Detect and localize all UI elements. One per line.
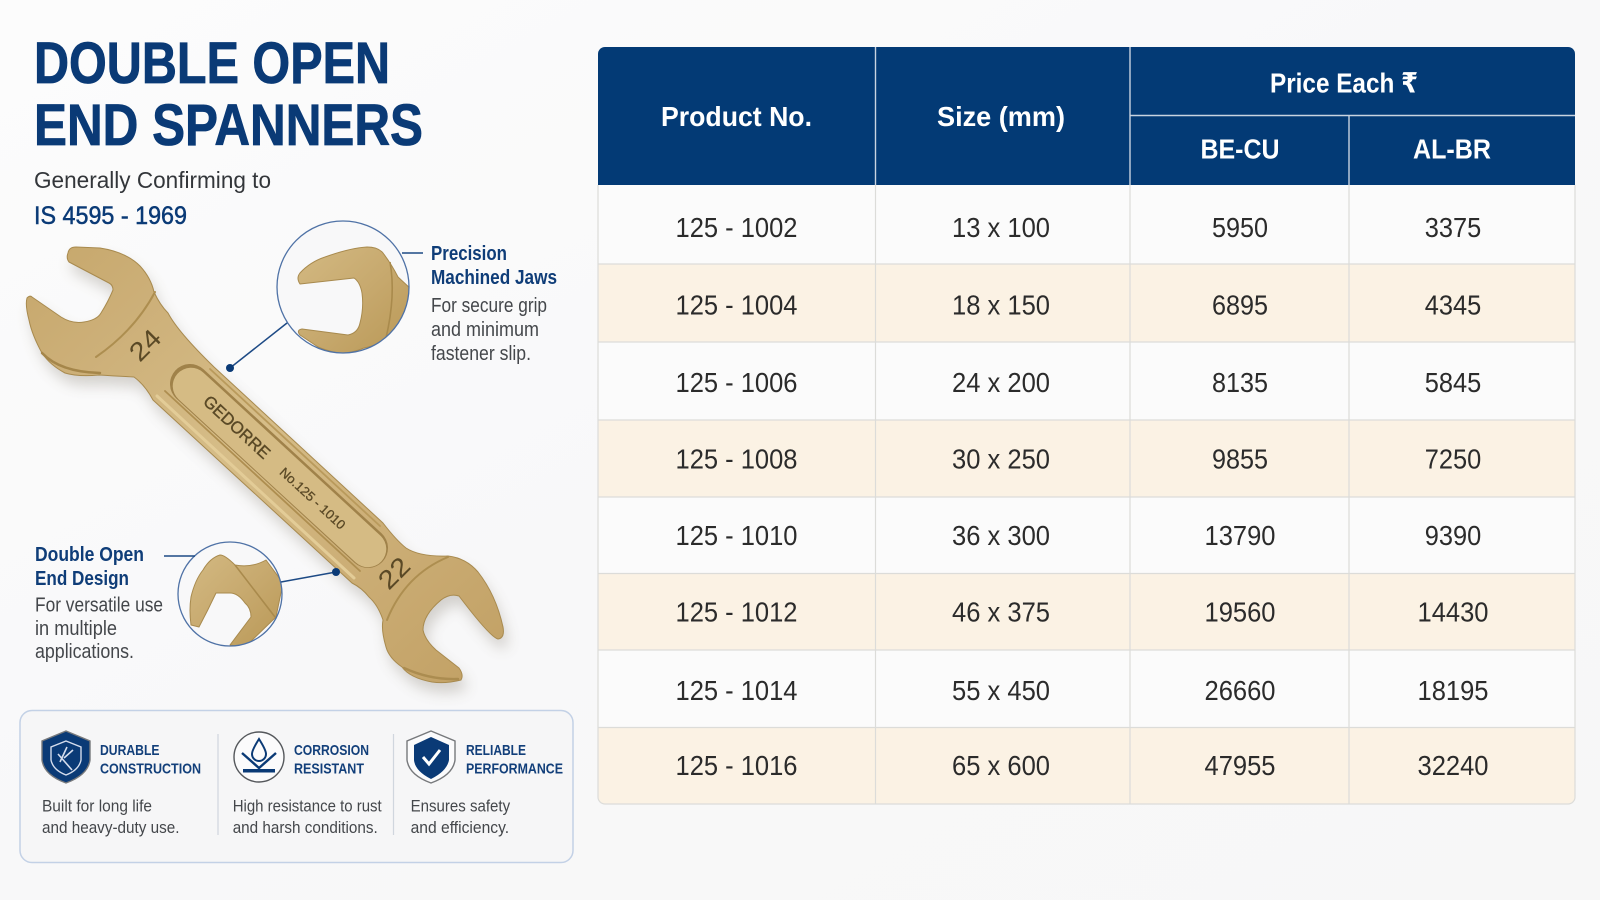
feature: durable construction: CONSTRUCTION (100, 761, 201, 778)
row 125-1012: 19560 (1204, 596, 1276, 628)
row 125-1004: 4345 (1425, 290, 1481, 320)
row 125-1010: 36 x 300 (952, 520, 1050, 551)
wrench engraved text: GEDORRE (199, 392, 274, 463)
callout text: in multiple (35, 618, 117, 640)
wrench engraved text: No.125 - 1010 (277, 464, 349, 532)
feature: corrosion resistant: High resistance to rust (233, 797, 382, 816)
callout text: For versatile use (35, 594, 163, 616)
feature: durable construction (42, 731, 201, 837)
feature: corrosion resistant: RESISTANT (294, 761, 364, 778)
row 125-1006: 5845 (1425, 367, 1481, 398)
panel: features (20, 710, 573, 862)
wrench engraved text: 24 (123, 323, 167, 367)
table header: Size (mm) (937, 101, 1065, 132)
feature: reliable performance: RELIABLE (466, 742, 526, 759)
table header: AL-BR (1413, 134, 1491, 165)
callout text: Double Open (35, 544, 144, 566)
row 125-1008: 9855 (1212, 444, 1268, 474)
icon: shield with check (407, 731, 455, 783)
wrench slot (190, 384, 368, 549)
row 125-1010: 13790 (1204, 520, 1276, 551)
feature: corrosion resistant (233, 732, 382, 837)
row 125-1002: 13 x 100 (952, 212, 1050, 243)
feature: durable construction: and heavy-duty use. (42, 818, 180, 837)
row 125-1014: 26660 (1204, 675, 1276, 706)
subtitle (34, 167, 271, 230)
callout: precision machined jaws (226, 221, 557, 372)
wrench illustration (26, 247, 507, 693)
row 125-1006: 8135 (1212, 367, 1268, 398)
magnifier circle: jaw detail (277, 221, 412, 353)
row 125-1016: 32240 (1418, 750, 1488, 781)
row 125-1012 (676, 596, 1488, 628)
feature: durable construction: Built for long life (42, 797, 152, 816)
magnifier circle: open end detail (178, 542, 283, 647)
feature: reliable performance: Ensures safety (411, 797, 511, 816)
table header: Product No. (661, 101, 812, 132)
row 125-1008: 125 - 1008 (676, 444, 798, 474)
callout text: fastener slip. (431, 343, 531, 365)
row 125-1006 (676, 367, 1481, 398)
subtitle: Generally Confirming to (34, 167, 271, 193)
row 125-1008: 7250 (1425, 444, 1481, 474)
feature: durable construction: DURABLE (100, 742, 160, 759)
row 125-1010: 125 - 1010 (676, 520, 798, 551)
feature: corrosion resistant: and harsh conditions. (233, 818, 378, 837)
callout text: End Design (35, 568, 129, 590)
row 125-1014 (676, 675, 1488, 706)
row 125-1002: 3375 (1425, 212, 1481, 243)
row 125-1008 (676, 444, 1481, 474)
table header: Price Each ₹ (1270, 68, 1418, 99)
feature: reliable performance (407, 731, 563, 837)
icon: shield with wrench (42, 731, 90, 783)
title (34, 31, 423, 158)
callout text: and minimum (431, 319, 539, 341)
wrench engraved text: 22 (372, 551, 416, 595)
table rows background (598, 185, 1575, 804)
row 125-1016: 65 x 600 (952, 750, 1050, 781)
table header: BE-CU (1200, 134, 1280, 165)
callout text: Machined Jaws (431, 267, 557, 289)
row 125-1002 (676, 212, 1481, 243)
callout text: Precision (431, 243, 507, 265)
icon: water drop on surface (234, 732, 284, 782)
row 125-1002: 5950 (1212, 212, 1268, 243)
wrench bevel edges (42, 292, 458, 679)
callout: double open end design (35, 542, 340, 663)
row 125-1002: 125 - 1002 (676, 212, 798, 243)
row 125-1012: 14430 (1418, 596, 1488, 628)
row 125-1008: 30 x 250 (952, 444, 1050, 474)
callout text: For secure grip (431, 295, 547, 317)
row 125-1004: 6895 (1212, 290, 1268, 320)
row 125-1006: 125 - 1006 (676, 367, 798, 398)
title: DOUBLE OPEN (34, 31, 390, 96)
price table (598, 47, 1575, 804)
row 125-1012: 46 x 375 (952, 596, 1050, 628)
row 125-1012: 125 - 1012 (676, 596, 798, 628)
feature: reliable performance: and efficiency. (411, 818, 509, 837)
row 125-1016: 125 - 1016 (676, 750, 798, 781)
callout text (35, 544, 163, 663)
row 125-1016 (676, 750, 1488, 781)
leader line to wrench (226, 323, 287, 372)
row 125-1006: 24 x 200 (952, 367, 1050, 398)
row 125-1014: 55 x 450 (952, 675, 1050, 706)
row 125-1014: 125 - 1014 (676, 675, 798, 706)
title: END SPANNERS (34, 93, 423, 158)
subtitle: IS 4595 - 1969 (34, 202, 187, 230)
row 125-1004: 18 x 150 (952, 290, 1050, 320)
row 125-1004 (676, 290, 1481, 320)
wrench engraved text (123, 323, 416, 595)
leader line to wrench (281, 568, 340, 582)
row 125-1010: 9390 (1425, 520, 1481, 551)
callout text: applications. (35, 641, 134, 663)
callout text (431, 243, 557, 365)
row 125-1004: 125 - 1004 (676, 290, 798, 320)
row 125-1010 (676, 520, 1481, 551)
feature: corrosion resistant: CORROSION (294, 742, 369, 759)
row 125-1014: 18195 (1418, 675, 1488, 706)
row 125-1016: 47955 (1204, 750, 1276, 781)
feature: reliable performance: PERFORMANCE (466, 761, 563, 778)
table header (598, 47, 1575, 185)
